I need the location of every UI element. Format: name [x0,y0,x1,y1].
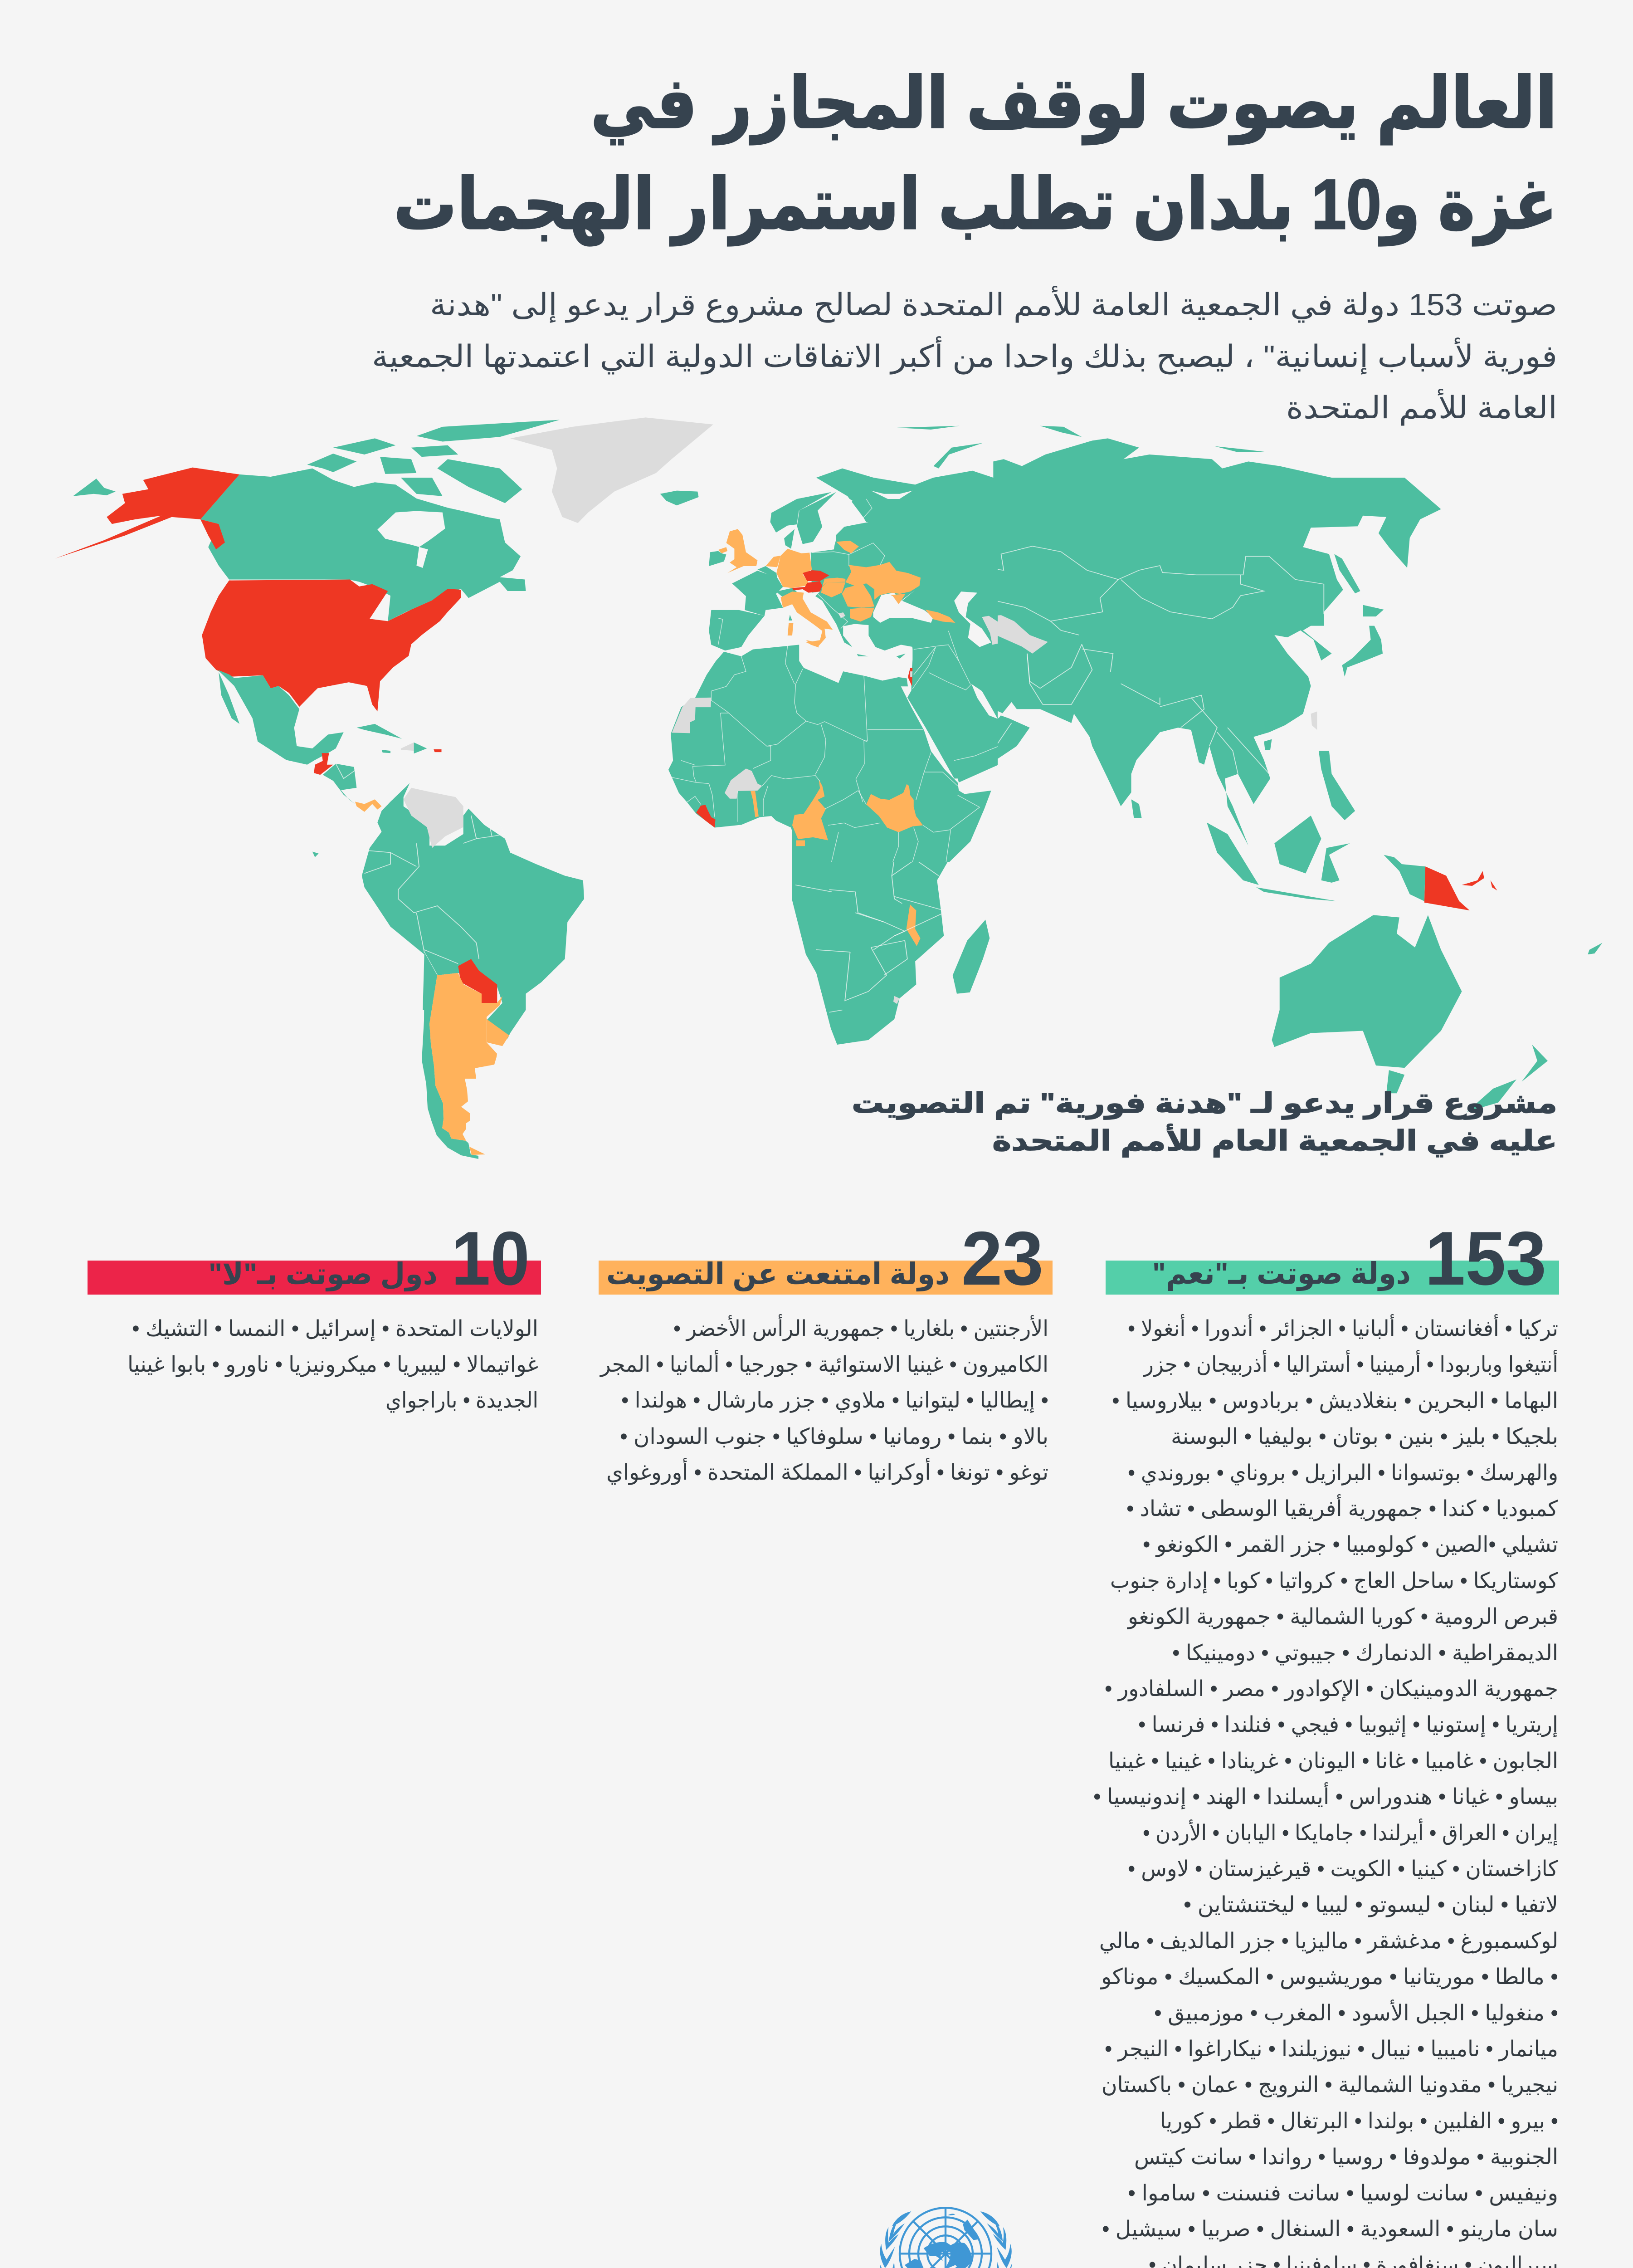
yes country list: • منغوليا • الجبل الأسود • المغرب • موزمبيق • [1154,1999,1558,2026]
yes country list [1090,1314,1558,2268]
yes country list: قبرص الرومية • كوريا الشمالية • جمهورية الكونغو [1127,1605,1558,1629]
yes country list: البهاما • البحرين • بنغلاديش • بربادوس • بيلاروسيا • [1112,1389,1558,1413]
no country list [127,1317,538,1413]
map: americas [55,417,713,1046]
yes country list: سان مارينو • السعودية • السنغال • صربيا • سيشيل • [1102,2217,1558,2242]
intro text: صوتت 153 دولة في الجمعية العامة للأمم المتحدة لصالح مشروع قرار يدعو إلى "هدنة [430,286,1557,323]
map: chile [422,953,478,1159]
abstain country list: الأرجنتين • بلغاريا • جمهورية الرأس الأخضر • [673,1314,1048,1341]
abstain country list: توغو • تونغا • أوكرانيا • المملكة المتحدة • أوروغواي [606,1458,1048,1485]
abstain header bar [599,1261,1053,1295]
no label: دول صوتت بـ"لا" [209,1257,438,1292]
icon: UN emblem [880,2208,1012,2268]
intro text [372,286,1557,426]
no count: 10 [451,1216,530,1301]
map: europe, africa, middle east [668,492,998,862]
no header bar [88,1261,541,1295]
abstain count: 23 [961,1216,1043,1301]
panel: voted yes [1090,1216,1559,2268]
abstain country list [600,1314,1048,1485]
yes country list: نيجيريا • مقدونيا الشمالية • النرويج • عمان • باكستان [1102,2073,1558,2097]
yes country list: لوكسمبورغ • مدغشقر • ماليزيا • جزر المالديف • مالي [1099,1929,1558,1954]
no country list: الجديدة • باراجواي [385,1388,538,1413]
yes country list: جمهورية الدومينيكان • الإكوادور • مصر • السلفادور • [1105,1677,1558,1701]
yes header bar [1106,1261,1559,1295]
world map [55,417,1602,1159]
subheading: مشروع قرار يدعو لـ "هدنة فورية" تم التصويت [852,1088,1557,1119]
abstain label: دولة امتنعت عن التصويت [606,1257,950,1292]
yes country list: بيساو • غيانا • هندوراس • أيسلندا • الهند • إندونيسيا • [1093,1782,1558,1809]
yes country list: كوستاريكا • ساحل العاج • كرواتيا • كوبا • إدارة جنوب [1110,1569,1558,1593]
title [394,64,1557,246]
no country list: الولايات المتحدة • إسرائيل • النمسا • التشيك • [132,1317,538,1341]
abstain country list: • إيطاليا • ليتوانيا • ملاوي • جزر مارشال • هولندا • [621,1388,1048,1413]
title: العالم يصوت لوقف المجازر في [590,64,1557,145]
yes country list: إيران • العراق • أيرلندا • جامايكا • اليابان • الأردن • [1143,1818,1558,1846]
abstain country list: بالاو • بنما • رومانيا • سلوفاكيا • جنوب السودان • [620,1425,1048,1449]
yes label: دولة صوتت بـ"نعم" [1152,1256,1411,1291]
subheading [852,1088,1557,1158]
yes country list: • مالطا • موريتانيا • موريشيوس • المكسيك • موناكو [1100,1965,1558,1989]
map: argentina [429,973,502,1155]
yes country list: لاتفيا • لبنان • ليسوتو • ليبيا • ليختنشتاين • [1184,1893,1558,1917]
intro text: فورية لأسباب إنسانية" ، ليصبح بذلك واحدا من أكبر الاتفاقات الدولية التي اعتمدتها الجمعية [372,336,1557,375]
yes country list: والهرسك • بوتسوانا • البرازيل • بروناي • بوروندي • [1128,1461,1558,1486]
subheading: عليه في الجمعية العام للأمم المتحدة [992,1124,1557,1158]
yes country list: الجنوبية • مولدوفا • روسيا • رواندا • سانت كيتس [1134,2145,1558,2170]
abstain country list: الكاميرون • غينيا الاستوائية • جورجيا • ألمانيا • المجر [600,1350,1048,1377]
no country list: غواتيمالا • ليبيريا • ميكرونيزيا • ناورو • بابوا غينيا [127,1353,538,1377]
panel: voted no [88,1216,541,1413]
yes country list: تركيا • أفغانستان • ألبانيا • الجزائر • أندورا • أنغولا • [1128,1314,1558,1341]
map: asia, southern africa, oceania [792,426,1602,1112]
yes country list: ميانمار • ناميبيا • نيبال • نيوزيلندا • نيكاراغوا • النيجر • [1105,2037,1558,2062]
yes country list: ونيفيس • سانت لوسيا • سانت فنسنت • ساموا • [1128,2181,1558,2206]
yes country list: إريتريا • إستونيا • إثيوبيا • فيجي • فنلندا • فرنسا • [1138,1713,1558,1737]
yes country list: الديمقراطية • الدنمارك • جيبوتي • دومينيكا • [1172,1641,1558,1666]
yes country list: • بيرو • الفلبين • بولندا • البرتغال • قطر • كوريا [1160,2109,1558,2134]
yes country list: أنتيغوا وباربودا • أرمينيا • أستراليا • أذربيجان • جزر [1143,1350,1558,1377]
yes country list: تشيلي •الصين • كولومبيا • جزر القمر • الكونغو • [1143,1533,1558,1557]
title: غزة و10 بلدان تطلب استمرار الهجمات [394,165,1557,246]
intro text: العامة للأمم المتحدة [1286,389,1557,426]
yes count: 153 [1425,1216,1546,1301]
yes country list: بلجيكا • بليز • بنين • بوتان • بوليفيا • البوسنة [1171,1425,1558,1449]
yes country list: الجابون • غامبيا • غانا • اليونان • غرينادا • غينيا • غينيا [1108,1749,1558,1774]
yes country list: كمبوديا • كندا • جمهورية أفريقيا الوسطى • تشاد • [1126,1494,1558,1521]
yes country list: كازاخستان • كينيا • الكويت • قيرغيزستان • لاوس • [1128,1857,1558,1882]
panel: abstained [599,1216,1053,1485]
